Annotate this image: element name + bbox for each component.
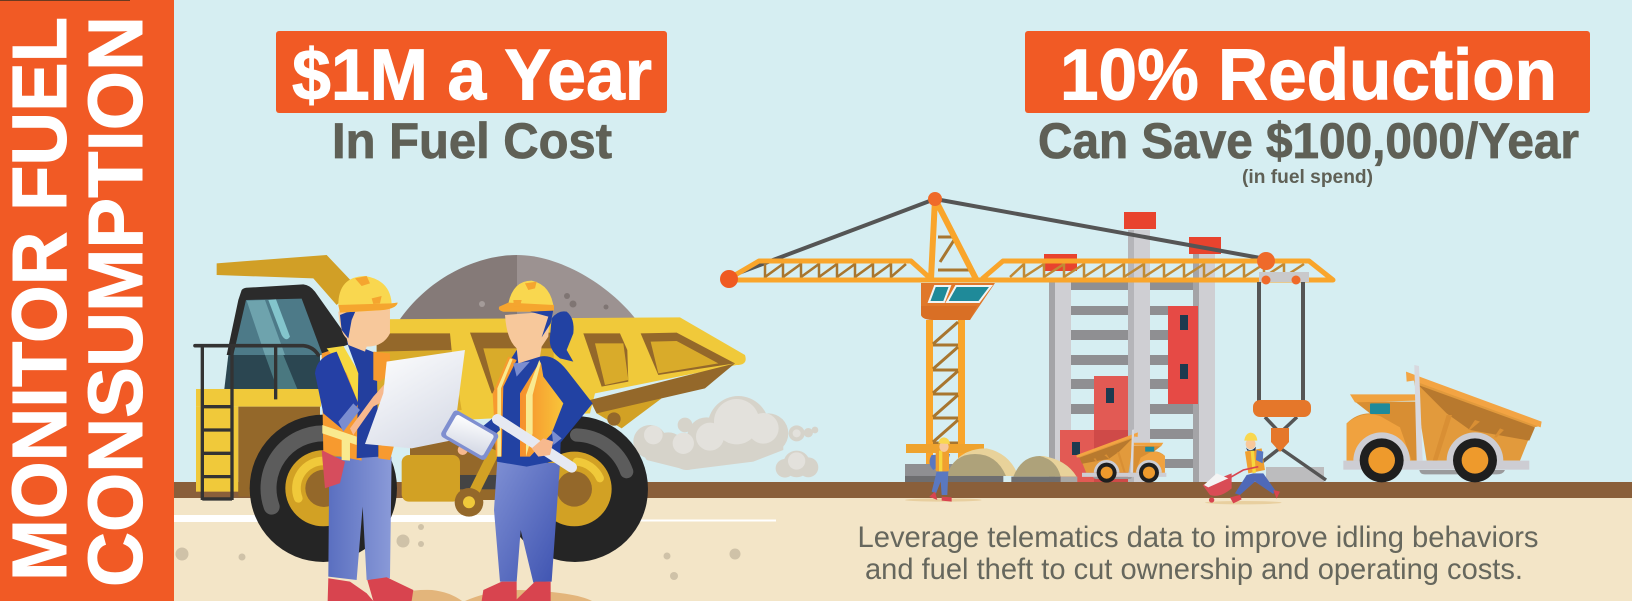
- gravel pile: [398, 255, 638, 322]
- stat callout: 10% reduction: 10% Reduction: [1060, 36, 1557, 116]
- clipboard: [440, 409, 500, 461]
- sidebar title: line 2: CONSUMPTION: [73, 16, 159, 587]
- building under construction: [1044, 212, 1221, 482]
- worker: woman with clipboard and rolled plans: [440, 281, 593, 601]
- stat subtitle: can save: Can Save $100,000/Year: [1038, 113, 1579, 169]
- crane: mast head: [928, 192, 976, 279]
- crane: tower mast: [926, 320, 965, 466]
- crane: cabin: [921, 283, 995, 320]
- tower crane: [720, 192, 1333, 482]
- stat subtitle: in fuel cost: In Fuel Cost: [332, 113, 612, 169]
- crane: cables: [728, 199, 1266, 277]
- crane: jib trusses: [728, 261, 1333, 280]
- body text: [858, 521, 1538, 586]
- sidebar: orange vertical title panel: [0, 0, 174, 601]
- truck: cab and chassis: [195, 255, 357, 500]
- crane: trolley and jib pivots: [720, 252, 1309, 288]
- body text: Leverage telematics data to improve idling behaviors: [858, 521, 1538, 554]
- ground: sand and road: [174, 482, 1632, 601]
- truck: dump bed and rear wheel: [377, 317, 746, 562]
- sand mounds: [905, 448, 1077, 482]
- dust clouds: [633, 396, 818, 478]
- orange dump truck, right: [1343, 365, 1542, 482]
- crane: base and cross beam: [905, 444, 1003, 482]
- small worker carrying beam: [905, 437, 982, 502]
- crane: hook and lifting cables: [1252, 282, 1326, 482]
- truck: front wheel: [250, 415, 397, 562]
- stat footnote: (in fuel spend): [1242, 167, 1373, 188]
- worker: man reading blueprint: [315, 276, 465, 601]
- small orange dump truck, centre: [1076, 429, 1166, 483]
- large yellow mining dump truck: [195, 255, 746, 562]
- stat callout: $1M a year: $1M a Year: [292, 36, 652, 116]
- small worker with wheelbarrow: [1203, 433, 1282, 504]
- body text: and fuel theft to cut ownership and operating costs.: [865, 553, 1523, 586]
